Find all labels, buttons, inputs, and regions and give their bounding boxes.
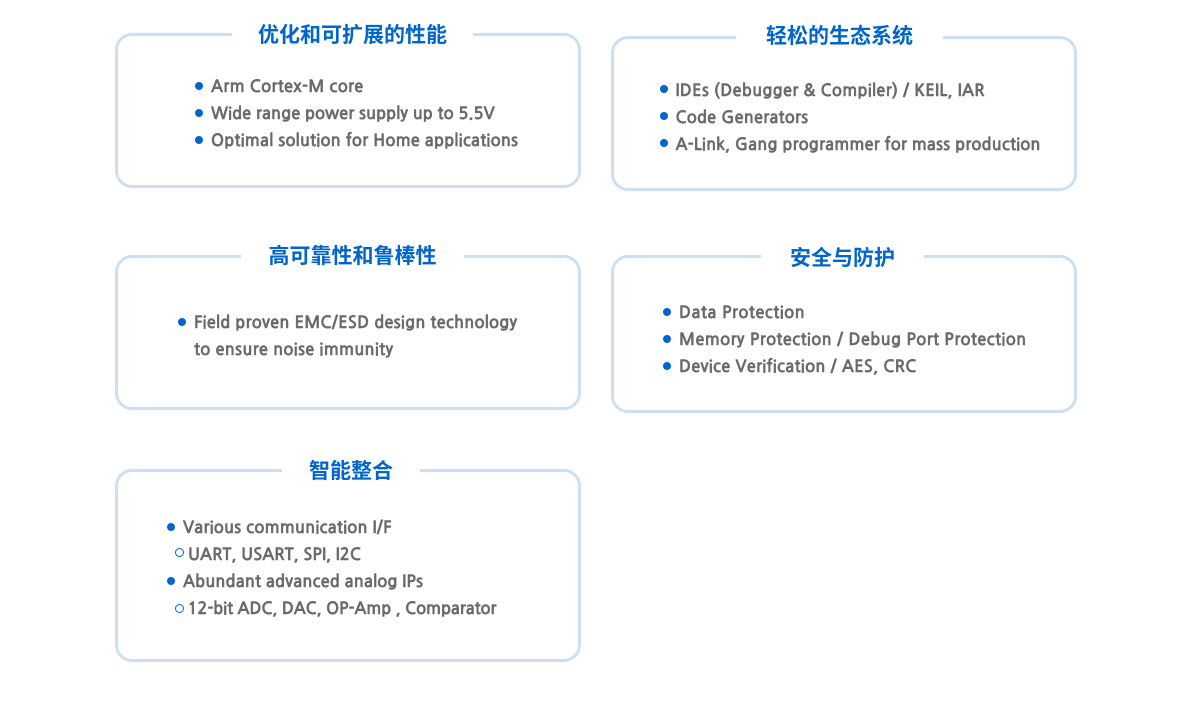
bullet list: ecosystem: A-Link, Gang programmer for mass production [676,137,1041,153]
bullet list: integration: Abundant advanced analog IPs [183,574,423,590]
panel: security [611,255,1077,413]
bullet list: security: Device Verification / AES, CRC [679,359,917,375]
bullet list: performance: Arm Cortex-M core [211,79,364,95]
panel: integration [115,469,581,662]
bullet list: security [663,305,1026,375]
bullet list: performance [195,79,518,149]
panel: reliability [115,255,581,410]
bullet list: integration: UART, USART, SPI, I2C [188,547,361,563]
bullet list: ecosystem: IDEs (Debugger & Compiler) / KEIL, IAR [676,83,985,99]
bullet list: security: Data Protection [679,305,805,321]
bullet list: performance: Wide range power supply up to 5.5V [211,106,495,122]
bullet list: ecosystem: Code Generators [676,110,808,126]
heading: ecosystem: 轻松的生态系统 [766,20,913,50]
heading: security: 安全与防护 [790,242,895,272]
bullet list: performance: Optimal solution for Home applications [211,133,518,149]
heading: integration [282,455,420,485]
bullet list: ecosystem [660,82,1041,153]
panel: ecosystem [611,36,1077,191]
heading: performance: 优化和可扩展的性能 [258,19,447,49]
bullet list: integration: 12-bit ADC, DAC, OP-Amp , Comparator [188,601,496,617]
bullet list: reliability: Field proven EMC/ESD design technology [194,315,517,331]
bullet list: reliability: to ensure noise immunity [194,342,393,358]
bullet list: integration [167,520,497,617]
bullet list: integration: Various communication I/F [183,520,392,536]
panel: performance [115,33,581,188]
bullet list: reliability [178,314,518,358]
heading: reliability: 高可靠性和鲁棒性 [268,240,436,270]
heading: integration: 智能整合 [309,455,393,485]
heading: security [761,242,924,272]
bullet list: security: Memory Protection / Debug Port Protection [679,332,1026,348]
